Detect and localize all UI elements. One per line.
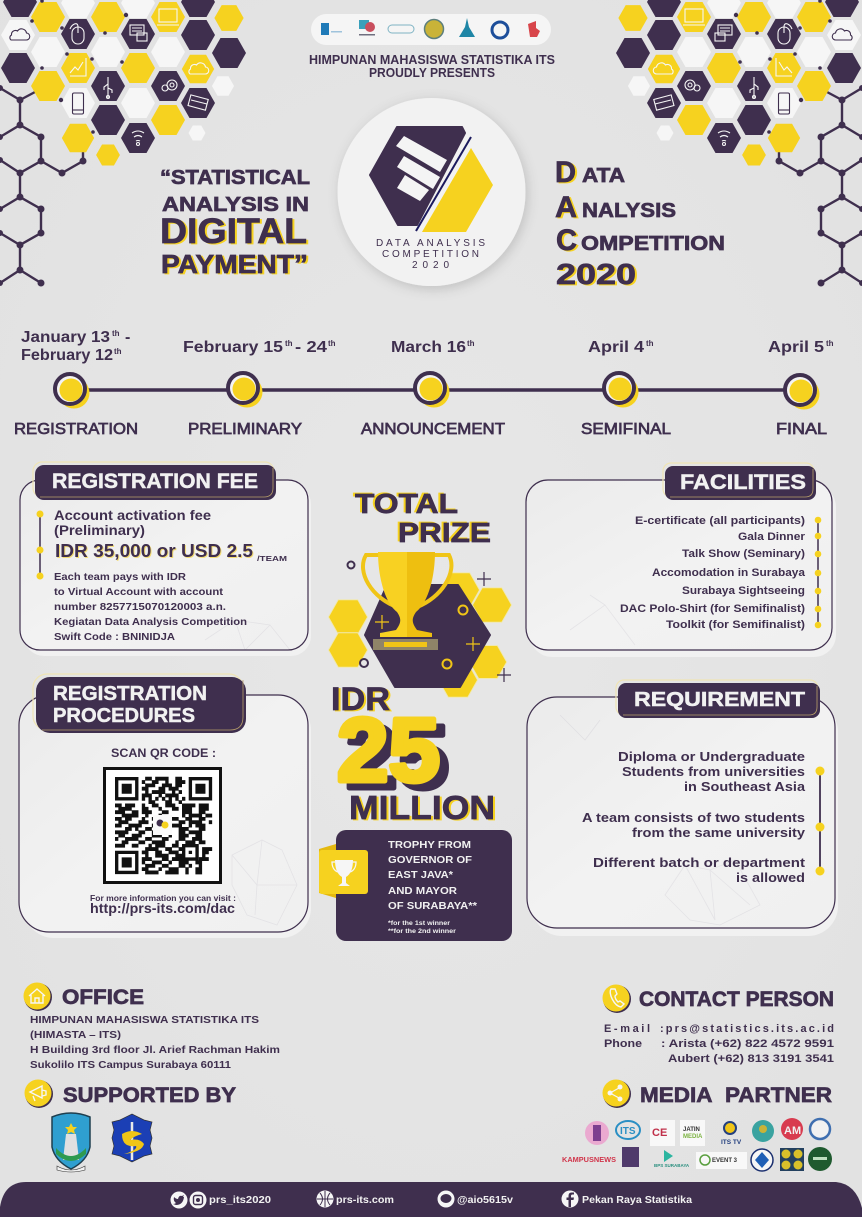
contact person block: CONTACT PERSON: [639, 988, 834, 1011]
trophy note text: [388, 839, 478, 935]
fee text: Account activation fee: [54, 508, 212, 523]
milestone: registration: -: [125, 329, 130, 346]
honeycomb and molecule decoration: left: [0, 0, 246, 286]
contact person block: [602, 984, 834, 1065]
social: facebook: Pekan Raya Statistika: [582, 1194, 692, 1206]
requirement list: [582, 750, 806, 885]
title: data analysis competition 2020: A: [555, 191, 577, 224]
media partner logos: [562, 1118, 832, 1171]
prize amount: [331, 681, 495, 826]
panel: registration fee: [20, 462, 311, 656]
requirement bullets: [816, 766, 824, 876]
requirement list: from the same university: [632, 826, 805, 840]
milestone: registration: REGISTRATION: [14, 421, 138, 438]
title: statistical analysis in digital payment: DIGITAL: [160, 212, 307, 251]
scan prompt: SCAN QR CODE :: [111, 748, 216, 760]
media partner logos: AM: [784, 1125, 801, 1137]
title: statistical analysis in digital payment: “STATISTICAL: [160, 167, 310, 189]
footer bar: [0, 1182, 862, 1217]
social: line: [438, 1190, 513, 1208]
heading: registration procedures: [33, 674, 246, 733]
honeycomb and molecule decoration: right: [616, 0, 862, 286]
media partner logos: ITS: [620, 1126, 636, 1137]
title: data analysis competition 2020: ATA: [582, 165, 625, 187]
contact details: E-mail: [604, 1023, 650, 1035]
milestone: registration: th: [112, 329, 120, 338]
trophy note text: AND MAYOR: [388, 885, 457, 897]
requirement list: in Southeast Asia: [684, 780, 806, 794]
trophy note text: *for the 1st winner: [388, 920, 450, 927]
logo: Surabaya city: [112, 1114, 152, 1162]
milestone: semifinal: th: [646, 339, 654, 348]
media partner block: MEDIA PARTNER: [640, 1084, 832, 1107]
media partner logos: ITS TV: [721, 1139, 742, 1146]
milestone: registration: January 13: [21, 329, 110, 346]
trophy note text: GOVERNOR OF: [388, 854, 473, 866]
office address: H Building 3rd floor Jl. Arief Rachman Hakim: [30, 1044, 280, 1056]
prize amount: MILLION: [349, 789, 495, 826]
milestone: announcement: [361, 339, 506, 438]
requirement list: Students from universities: [622, 765, 805, 779]
panel: registration procedures: [19, 674, 311, 938]
requirement list: A team consists of two students: [582, 811, 805, 825]
trophy note text: **for the 2nd winner: [388, 928, 457, 935]
more information link: [90, 893, 236, 916]
heading: registration procedures: REGISTRATION: [53, 683, 207, 705]
presenter heading: HIMPUNAN MAHASISWA STATISTIKA ITS: [309, 53, 555, 67]
total prize heading: TOTAL: [355, 488, 458, 519]
facilities list: E-certificate (all participants): [635, 515, 805, 527]
contact details: :prs@statistics.its.ac.id: [660, 1023, 834, 1035]
icon: megaphone: [24, 1080, 53, 1108]
office address: (HIMASTA – ITS): [30, 1029, 121, 1041]
media partner logos: BPS SURABAYA: [654, 1163, 690, 1168]
social: facebook: [562, 1190, 692, 1208]
trophy note text: OF SURABAYA**: [388, 900, 478, 912]
title: data analysis competition 2020: D: [555, 156, 576, 189]
contact details: [604, 1023, 834, 1065]
heading: registration fee: [33, 462, 276, 500]
icon: house: [24, 982, 52, 1011]
milestone: registration: th: [114, 347, 122, 356]
heading: registration procedures: PROCEDURES: [53, 705, 195, 727]
heading: requirement: REQUIREMENT: [634, 689, 805, 711]
panel: requirement: [527, 680, 838, 936]
office block: [24, 982, 280, 1071]
total prize heading: [355, 488, 491, 548]
milestone: announcement: ANNOUNCEMENT: [361, 421, 506, 438]
title: statistical analysis in digital payment: PAYMENT”: [161, 249, 308, 279]
facilities list: Gala Dinner: [738, 531, 806, 543]
presenter heading: PROUDLY PRESENTS: [369, 66, 495, 80]
social: twitter and instagram: [170, 1192, 271, 1208]
media partner logos: EVENT 3: [712, 1158, 738, 1164]
timeline bullets: [36, 510, 44, 580]
contact details: Aubert (+62) 813 3191 3541: [668, 1053, 834, 1065]
social: line: @aio5615v: [457, 1194, 513, 1206]
requirement list: Diploma or Undergraduate: [618, 750, 805, 764]
trophy note text: TROPHY FROM: [388, 839, 471, 851]
facilities list: DAC Polo-Shirt (for Semifinalist): [620, 603, 805, 615]
office block: OFFICE: [62, 986, 144, 1009]
heading: facilities: [663, 463, 816, 500]
office address: Sukolilo ITS Campus Surabaya 60111: [30, 1059, 231, 1071]
facilities bullets: [815, 517, 821, 628]
supported by block: SUPPORTED BY: [63, 1084, 236, 1107]
icon: phone: [602, 984, 631, 1013]
heading: registration fee: REGISTRATION FEE: [52, 470, 258, 493]
milestone: announcement: th: [467, 339, 475, 348]
media partner logos: KAMPUSNEWS: [562, 1155, 616, 1164]
supported by block: [24, 1080, 236, 1172]
media partner logos: CE: [652, 1127, 667, 1139]
milestone: final: April 5: [768, 339, 824, 356]
timeline: [14, 329, 834, 438]
fee text: to Virtual Account with account: [54, 586, 224, 598]
QR code: [104, 768, 220, 882]
logo: East Java province: [52, 1113, 90, 1172]
presenter heading: [309, 53, 555, 80]
facilities list: Toolkit (for Semifinalist): [666, 619, 805, 631]
milestone: registration: February 12: [21, 347, 113, 364]
title: data analysis competition 2020: [555, 156, 725, 291]
office address: [30, 1014, 280, 1071]
title: data analysis competition 2020: 2020: [556, 259, 636, 291]
fee text: [54, 508, 287, 643]
milestone: preliminary: th: [285, 339, 293, 348]
title: data analysis competition 2020: OMPETITION: [581, 233, 725, 255]
title: data analysis competition 2020: C: [556, 224, 577, 257]
media partner logos: JATIN: [683, 1127, 700, 1133]
heading: requirement: [616, 680, 820, 718]
milestone: preliminary: [183, 339, 336, 438]
prize amount: 25: [337, 701, 440, 801]
panel: facilities: [526, 463, 836, 657]
milestone: preliminary: PRELIMINARY: [188, 421, 302, 438]
organiser logo strip: [311, 14, 551, 45]
more information link: http://prs-its.com/dac: [90, 900, 235, 916]
media partner block: [562, 1080, 832, 1171]
fee text: /TEAM: [257, 554, 287, 563]
facilities list: Talk Show (Seminary): [682, 548, 805, 560]
icon: share nodes: [602, 1080, 631, 1108]
fee text: (Preliminary): [54, 523, 145, 538]
requirement list: is allowed: [736, 871, 805, 885]
milestone: semifinal: [581, 339, 671, 438]
more information link: For more information you can visit :: [90, 893, 236, 903]
milestone: preliminary: - 24: [295, 339, 327, 356]
title: statistical analysis in digital payment: [160, 167, 310, 279]
prize amount: IDR: [331, 681, 390, 717]
fee text: Swift Code : BNINIDJA: [54, 631, 175, 643]
fee text: number 8257715070120003 a.n.: [54, 601, 226, 613]
trophy illustration: [328, 552, 512, 697]
milestone: semifinal: SEMIFINAL: [581, 421, 671, 438]
title: statistical analysis in digital payment: ANALYSIS IN: [162, 194, 309, 216]
milestone: preliminary: February 15: [183, 339, 283, 356]
title: data analysis competition 2020: NALYSIS: [582, 200, 676, 222]
heading: facilities: FACILITIES: [680, 471, 806, 494]
trophy note box: [319, 830, 512, 941]
milestone: semifinal: April 4: [588, 339, 644, 356]
milestone: final: th: [826, 339, 834, 348]
facilities list: Accomodation in Surabaya: [652, 567, 806, 579]
milestone: final: [768, 339, 834, 438]
total prize heading: PRIZE: [398, 517, 491, 548]
trophy note text: EAST JAVA*: [388, 869, 454, 881]
fee text: IDR 35,000 or USD 2.5: [55, 541, 253, 561]
fee text: Each team pays with IDR: [54, 571, 186, 583]
milestone: final: FINAL: [776, 421, 827, 438]
fee text: Kegiatan Data Analysis Competition: [54, 616, 247, 628]
office address: HIMPUNAN MAHASISWA STATISTIKA ITS: [30, 1014, 259, 1026]
contact details: Phone: [604, 1038, 642, 1050]
DAC 2020 logo badge: DATA ANALYSIS: [376, 238, 485, 249]
DAC 2020 logo badge: 2020: [412, 260, 449, 271]
social: twitter and instagram: prs_its2020: [209, 1194, 271, 1206]
media partner logos: MEDIA: [683, 1134, 703, 1140]
icon: white trophy: [332, 860, 356, 886]
DAC 2020 logo badge: [338, 98, 526, 286]
milestone: announcement: March 16: [391, 339, 466, 356]
social: website: prs-its.com: [336, 1194, 394, 1206]
requirement list: Different batch or department: [593, 856, 806, 870]
contact details: : Arista (+62) 822 4572 9591: [661, 1038, 834, 1050]
DAC 2020 logo badge: COMPETITION: [382, 249, 479, 260]
milestone: preliminary: th: [328, 339, 336, 348]
milestone: registration: [14, 329, 138, 438]
facilities list: Surabaya Sightseeing: [682, 585, 805, 597]
social: website: [316, 1190, 394, 1208]
facilities list: [620, 515, 806, 631]
